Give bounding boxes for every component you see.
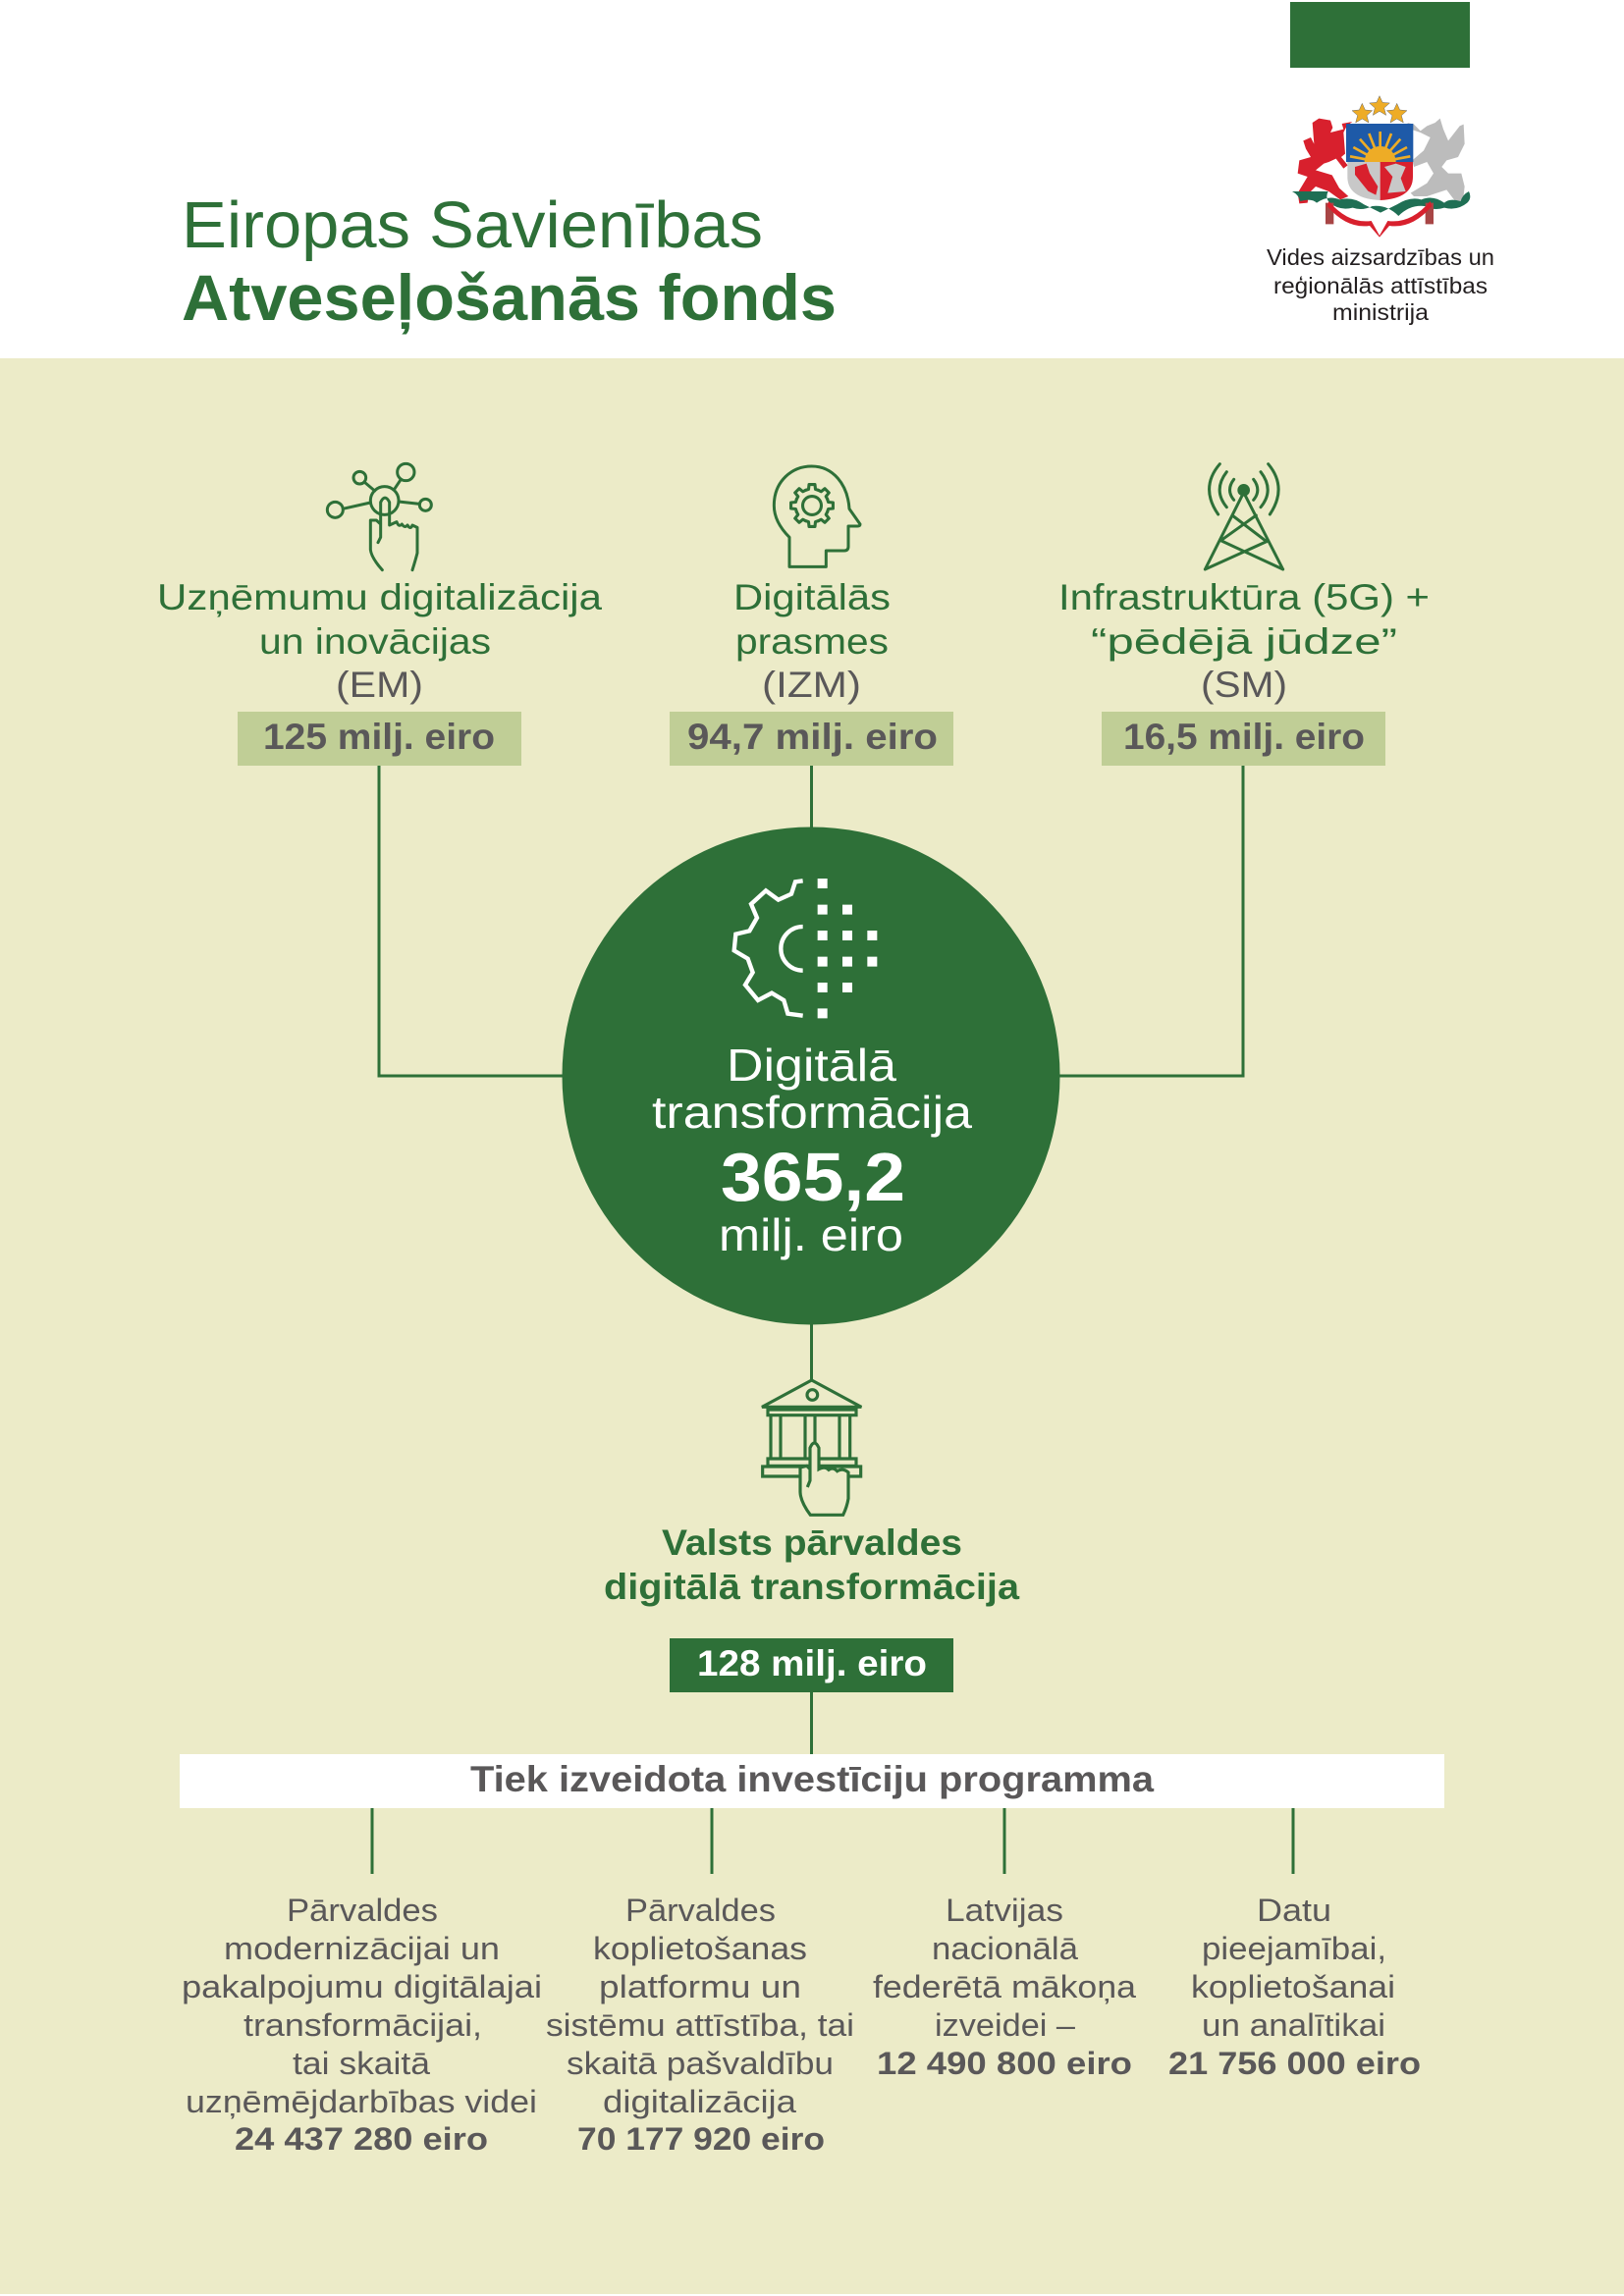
label: digital skills: prasmes	[735, 621, 889, 662]
column 3: Latvijas	[946, 1893, 1063, 1928]
icon: coat of arms	[1292, 96, 1470, 238]
title	[182, 188, 837, 335]
column 3: 12 490 800 eiro	[877, 2046, 1132, 2081]
green header rectangle	[1290, 2, 1470, 68]
column 2: Pārvaldes	[625, 1893, 776, 1928]
amount box: 94,7: 94,7 milj. eiro	[687, 717, 938, 757]
ministry name: reģionālās attīstības	[1273, 273, 1488, 298]
column 3: federētā mākoņa	[873, 1969, 1136, 2004]
column 4	[1168, 1893, 1421, 2081]
column 1: tai skaitā	[293, 2046, 430, 2081]
column 1	[182, 1893, 542, 2157]
ministry name: Vides aizsardzības un	[1267, 244, 1494, 270]
column 2: koplietošanas	[593, 1931, 807, 1966]
label: business digitalisation	[157, 577, 602, 705]
ministry name	[1267, 244, 1494, 325]
heading: public administration: Valsts pārvaldes	[662, 1522, 962, 1563]
label: digital skills: Digitālās	[733, 577, 891, 617]
heading: public administration	[604, 1522, 1019, 1607]
investment programme bar: Tiek izveidota investīciju programma	[470, 1759, 1154, 1799]
label: digital skills	[733, 577, 891, 705]
heading: public administration: digitālā transformācija	[604, 1567, 1019, 1607]
column 4: 21 756 000 eiro	[1168, 2046, 1421, 2081]
column 1: Pārvaldes	[287, 1893, 438, 1928]
circle text: transformācija	[652, 1087, 972, 1138]
amount box: 125: 125 milj. eiro	[263, 717, 495, 757]
icon: government building with hand	[762, 1380, 861, 1515]
amount box: 16,5: 16,5 milj. eiro	[1123, 717, 1365, 757]
column 1: transformācijai,	[244, 2007, 482, 2043]
column 4: pieejamībai,	[1202, 1931, 1386, 1966]
amount box: 125	[238, 712, 521, 766]
label: infrastructure: Infrastruktūra (5G) +	[1058, 577, 1430, 617]
amount box: 94,7	[670, 712, 953, 766]
circle text: milj. eiro	[719, 1209, 903, 1260]
column 3	[873, 1893, 1136, 2081]
label: business digitalisation: (EM)	[336, 665, 423, 705]
ministry name: ministrija	[1332, 299, 1429, 325]
label: business digitalisation: un inovācijas	[259, 621, 491, 662]
investment programme bar	[180, 1754, 1444, 1808]
label: digital skills: (IZM)	[762, 665, 861, 705]
connector lines	[372, 766, 1293, 1874]
amount box: 128	[670, 1638, 953, 1692]
label: business digitalisation: Uzņēmumu digitalizācija	[157, 577, 602, 617]
circle text: Digitālā	[727, 1040, 896, 1091]
icon: head with gear	[774, 466, 860, 566]
icon: hand touching network	[327, 463, 431, 570]
label: infrastructure: (SM)	[1201, 665, 1287, 705]
title: Atveseļošanās fonds	[182, 261, 837, 335]
column 3: nacionālā	[932, 1931, 1078, 1966]
amount box: 16,5	[1102, 712, 1385, 766]
column 4: koplietošanai	[1191, 1969, 1395, 2004]
central circle	[562, 827, 1060, 1325]
column 2: skaitā pašvaldību	[567, 2046, 834, 2081]
column 3: izveidei –	[935, 2007, 1075, 2043]
title: Eiropas Savienības	[182, 188, 763, 262]
column 1: pakalpojumu digitālajai	[182, 1969, 542, 2004]
column 2	[546, 1893, 854, 2157]
icon: gear with pixels	[734, 879, 877, 1018]
column 4: un analītikai	[1202, 2007, 1385, 2043]
label: infrastructure: “pēdējā jūdze”	[1091, 621, 1397, 662]
column 2: 70 177 920 eiro	[577, 2121, 825, 2157]
column 2: digitalizācija	[603, 2084, 796, 2119]
circle text: 365,2	[721, 1139, 905, 1215]
icon: signal tower	[1205, 464, 1283, 569]
column 2: platformu un	[599, 1969, 801, 2004]
amount box: 128: 128 milj. eiro	[697, 1643, 927, 1683]
column 1: 24 437 280 eiro	[235, 2121, 488, 2157]
column 1: uzņēmējdarbības videi	[186, 2084, 537, 2119]
column 2: sistēmu attīstība, tai	[546, 2007, 854, 2043]
label: infrastructure	[1058, 577, 1430, 705]
column 4: Datu	[1257, 1893, 1331, 1928]
circle text	[652, 1040, 972, 1260]
column 1: modernizācijai un	[224, 1931, 500, 1966]
